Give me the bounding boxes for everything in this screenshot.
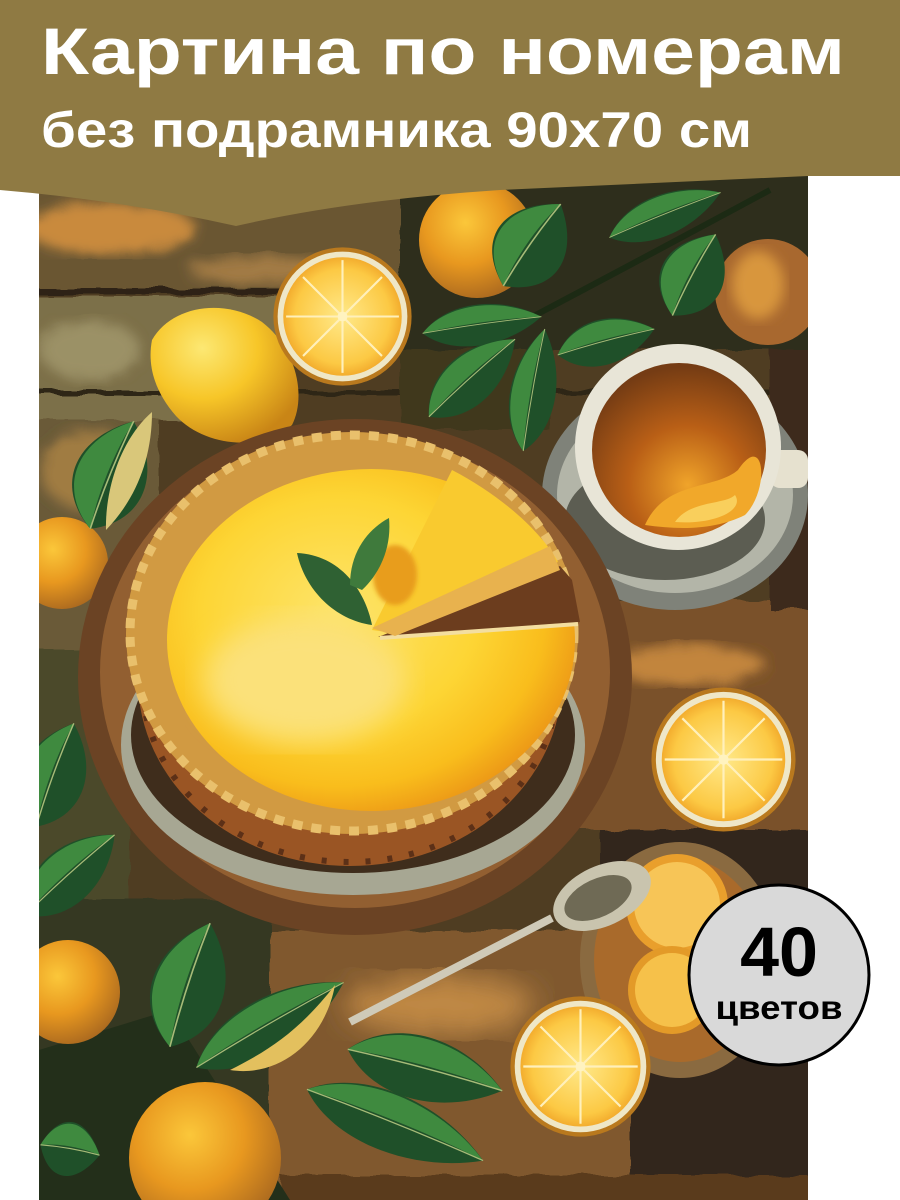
badge: 40 colours (689, 885, 869, 1065)
subtitle: без подрамника 90х70 см (41, 102, 752, 158)
header banner (0, 0, 900, 226)
lemon slice: top (273, 247, 412, 386)
wooden table background (25, 170, 820, 1200)
leaves: top right branch (412, 173, 770, 455)
teacup and saucer (542, 344, 808, 610)
lemon slice: bottom (510, 996, 651, 1137)
tart crust (126, 432, 578, 834)
orange and leaves: left of tart (39, 412, 152, 609)
badge: 40 colours: 40 (740, 913, 818, 991)
highlight on top right orange (732, 251, 784, 319)
plate with lemon slices (580, 842, 758, 1078)
missing slice wedge (378, 566, 580, 637)
badge: 40 colours: цветов (716, 989, 842, 1026)
orange: top center (419, 190, 526, 298)
spoon (350, 847, 662, 1022)
tart filling (167, 469, 575, 811)
leaves: left edge (39, 723, 115, 916)
tart garnish leaves (297, 518, 417, 625)
orange: top right (716, 239, 808, 345)
lemon: whole (151, 308, 299, 443)
title: Картина по номерам (41, 14, 845, 88)
tart on wooden board (78, 419, 632, 935)
lemon slice: right (651, 687, 796, 832)
cut slice (372, 470, 558, 634)
oranges and leaves: bottom (16, 912, 511, 1200)
painting: lemon tart on wooden table (6, 170, 821, 1200)
